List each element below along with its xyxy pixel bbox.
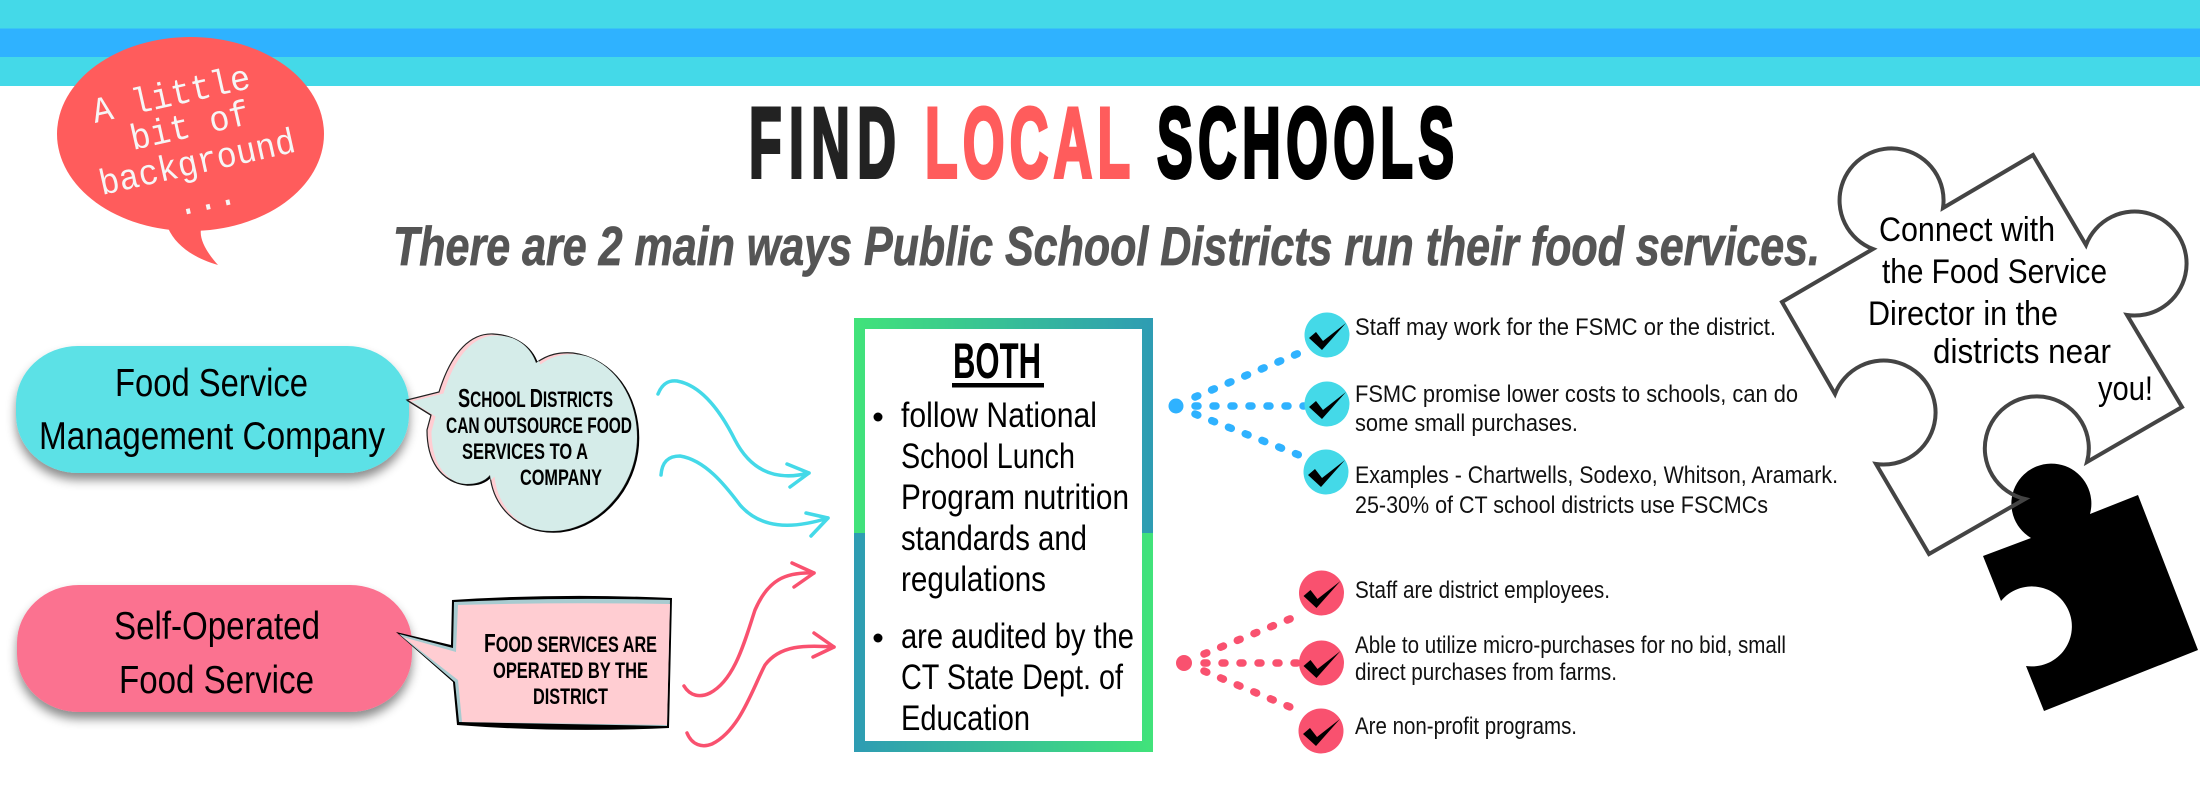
panel: both: follow National — [901, 396, 1097, 435]
panel: both: School Lunch — [901, 437, 1075, 476]
speech bubble: a little bit of background: ... — [172, 173, 241, 227]
subtitle: There are 2 main ways Public School Districts run their food services. — [393, 215, 1820, 277]
dotted connector: pink — [1176, 614, 1302, 712]
cloud callout: outsource: CAN OUTSOURCE FOOD — [446, 413, 632, 438]
pill: food service management company: Management Company — [39, 415, 385, 458]
panel: puzzle outline with connect text: districts near — [1933, 333, 2111, 371]
text list: self-operated points: Are non-profit programs. — [1355, 713, 1577, 740]
text list: management company points — [1355, 314, 1838, 519]
panel: puzzle outline with connect text: the Food Service — [1882, 253, 2107, 291]
panel: puzzle outline with connect text: you! — [2098, 370, 2153, 408]
icon: black puzzle piece — [1983, 464, 2198, 711]
pill: food service management company — [16, 346, 409, 473]
icons: teal checks — [1304, 312, 1350, 494]
icons: pink checks — [1298, 570, 1344, 754]
panel: both: standards and — [901, 519, 1087, 558]
cloud callout: outsource: COMPANY — [520, 465, 602, 490]
speech bubble: a little bit of background: bit of — [126, 94, 253, 161]
text list: management company points: FSMC promise lower costs to schools, can do — [1355, 381, 1798, 408]
panel: both: are audited by the — [901, 617, 1134, 656]
box callout: district operated: DISTRICT — [533, 684, 608, 709]
title: LOCAL — [925, 87, 1130, 198]
cloud callout: outsource: SERVICES TO A — [462, 439, 588, 464]
text list: self-operated points — [1355, 577, 1786, 740]
arrows: teal to both box — [658, 381, 828, 536]
panel: puzzle outline with connect text: Connect with — [1879, 211, 2055, 249]
pill: self-operated food service — [17, 585, 412, 712]
speech bubble: a little bit of background: A little — [88, 59, 255, 134]
box callout: district operated: OPERATED BY THE — [493, 658, 648, 683]
title — [749, 87, 1454, 198]
cloud callout: outsource — [407, 334, 642, 532]
title: FIND — [749, 87, 896, 198]
pill: food service management company: Food Service — [115, 362, 308, 405]
text list: management company points: some small purchases. — [1355, 410, 1578, 437]
pill: self-operated food service: Food Service — [119, 659, 314, 702]
panel: both: BOTH — [953, 333, 1041, 389]
cloud callout: outsource: SCHOOL DISTRICTS — [458, 383, 613, 413]
dotted connector: blue — [1168, 351, 1304, 457]
speech bubble: a little bit of background — [57, 37, 324, 265]
header stripes — [0, 0, 2200, 86]
text list: management company points: 25-30% of CT school districts use FSCMCs — [1355, 492, 1768, 519]
panel: both: CT State Dept. of — [901, 658, 1123, 697]
text list: self-operated points: Able to utilize micro-purchases for no bid, small — [1355, 632, 1786, 659]
box callout: district operated — [396, 596, 672, 730]
panel: puzzle outline with connect text — [1782, 148, 2187, 554]
text list: management company points: Staff may work for the FSMC or the district. — [1355, 314, 1776, 341]
arrows: pink to both box — [684, 563, 834, 746]
panel: puzzle outline with connect text: Director in the — [1868, 295, 2058, 333]
text list: management company points: Examples - Chartwells, Sodexo, Whitson, Aramark. — [1355, 462, 1838, 489]
text list: self-operated points: Staff are district employees. — [1355, 577, 1610, 604]
panel: both: regulations — [901, 560, 1046, 599]
box callout: district operated: FOOD SERVICES ARE — [484, 628, 657, 658]
speech bubble: a little bit of background: background — [95, 122, 300, 206]
panel: both: Program nutrition — [901, 478, 1129, 517]
panel: both — [854, 318, 1153, 752]
panel: both: Education — [901, 699, 1030, 738]
text list: self-operated points: direct purchases from farms. — [1355, 659, 1617, 686]
title: SCHOOLS — [1157, 87, 1454, 198]
pill: self-operated food service: Self-Operated — [114, 605, 320, 648]
